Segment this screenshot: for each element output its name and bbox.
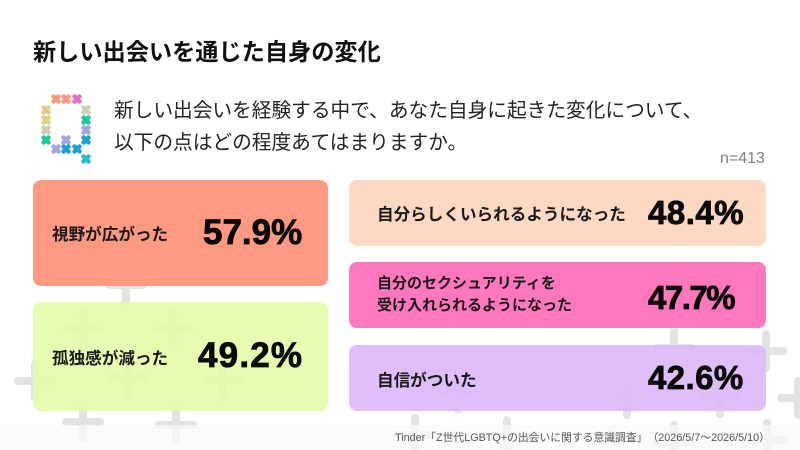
sample size: n=413 bbox=[720, 150, 765, 167]
label: 自分らしくいられるようになった bbox=[377, 205, 626, 224]
question text: 以下の点はどの程度あてはまりますか。 bbox=[114, 132, 467, 154]
panel: accept sexuality bbox=[349, 262, 766, 328]
question text bbox=[114, 100, 702, 154]
title: 新しい出会いを通じた自身の変化 bbox=[33, 39, 381, 65]
label bbox=[377, 275, 572, 314]
value: 47.7% bbox=[648, 279, 734, 316]
source note: Tinder「Z世代LGBTQ+の出会いに関する意識調査」（2026/5/7〜2026/5/10） bbox=[395, 432, 770, 444]
value: 48.4% bbox=[648, 194, 744, 231]
label: 視野が広がった bbox=[52, 225, 168, 244]
value: 49.2% bbox=[198, 336, 303, 375]
label: 自信がついた bbox=[377, 371, 477, 390]
label: 受け入れられるようになった bbox=[377, 297, 572, 314]
panel: confidence bbox=[349, 345, 766, 411]
label: 自分のセクシュアリティを bbox=[377, 275, 556, 292]
footer strip bbox=[0, 425, 800, 450]
question text: 新しい出会いを経験する中で、あなた自身に起きた変化について、 bbox=[114, 100, 702, 122]
label: 孤独感が減った bbox=[52, 349, 168, 368]
panel: be myself bbox=[349, 180, 766, 246]
icon: Q made of crosses bbox=[41, 94, 91, 164]
value: 57.9% bbox=[203, 213, 302, 252]
panel: less lonely bbox=[33, 302, 328, 411]
value: 42.6% bbox=[648, 359, 744, 396]
panel: broadened horizons bbox=[33, 180, 328, 286]
